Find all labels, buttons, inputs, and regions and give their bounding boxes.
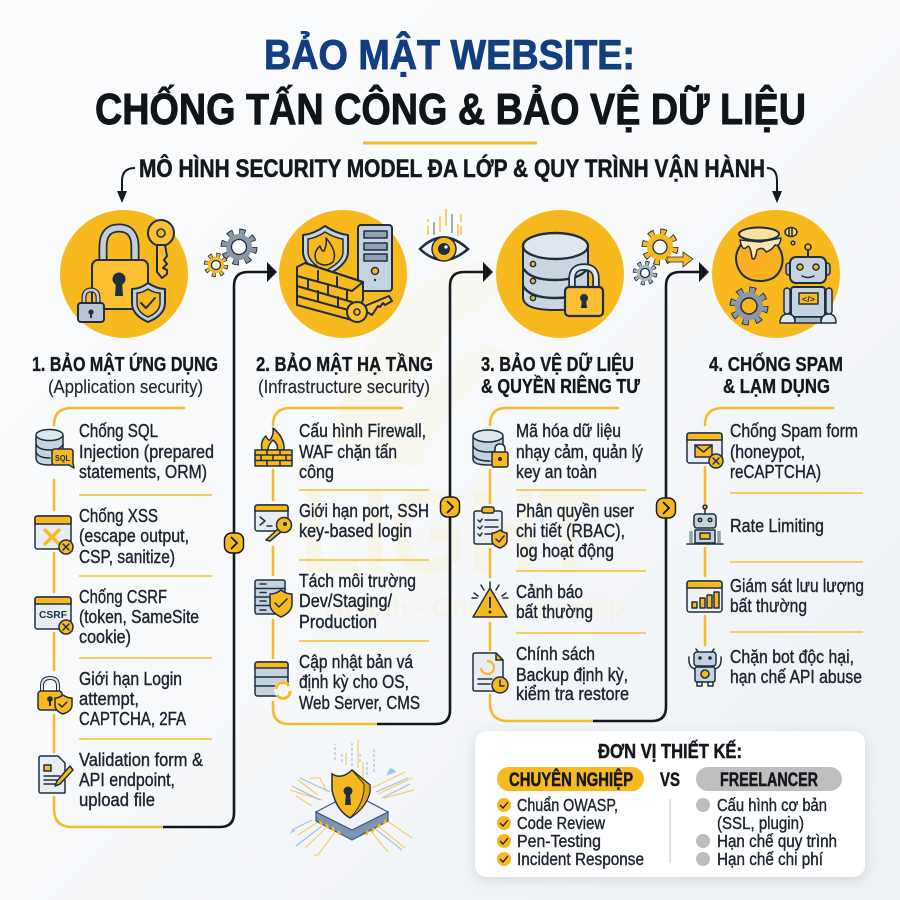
text: login limit: attempt, [79,688,139,709]
chevron badge 1 [224,533,244,553]
card heading: ĐƠN VỊ THIẾT KẾ: [598,740,742,763]
text: traffic monitoring [730,575,864,616]
list: professional: Pen-Testing [517,831,601,851]
icon: database lock [473,430,508,467]
text: rate limiting: Rate Limiting [730,515,824,536]
text: firewall: Cấu hình Firewall, [299,420,426,441]
heading: column 4 [709,352,843,398]
text: spam form: (honeypot, [730,441,805,462]
text: login limit: Giới hạn Login [79,668,182,689]
text: bad bots: Chặn bot độc hại, [730,646,854,667]
icon: spam mail window [687,433,723,468]
connector lines column 3 to 4 [490,262,709,721]
icon: database lock circle [496,210,624,338]
watermark logo [300,260,625,622]
text: validation [79,749,204,810]
text: sql injection [79,420,214,482]
text: validation: Validation form & [79,749,204,770]
list: freelancer: Hạn chế chi phí [717,849,823,869]
heading: column 2 [256,352,433,397]
panel: application security [35,420,214,810]
heading: column 3 [481,352,640,398]
text: backup: kiểm tra restore [516,683,629,704]
heading: column 3: & QUYỀN RIÊNG TƯ [481,374,640,398]
text: port ssh: key-based login [299,520,412,541]
connector lines column 4 [705,408,833,645]
heading: column 2: (Infrastructure security) [258,377,430,397]
icon: backup document [473,653,508,693]
heading: column 3: 3. BẢO VỆ DỮ LIỆU [481,352,634,376]
badge: professional: CHUYÊN NGHIỆP [509,769,633,791]
text: sql injection: Injection (prepared [79,441,214,462]
text: patching: Web Server, CMS [299,692,420,713]
text: firewall: công [299,461,334,482]
icon: honeypot and robot circle [712,210,840,338]
text: csrf [79,586,199,647]
icon: csrf window [35,597,73,634]
list: professional: Code Review [517,813,605,833]
text: bad bots: hạn chế API abuse [730,666,862,687]
title: CHỐNG TẤN CÔNG & BẢO VỆ DỮ LIỆU [95,83,806,134]
text: alerts: Cảnh báo [516,581,583,602]
text: permissions: chi tiết (RBAC), [516,520,625,541]
panel: anti spam [687,420,864,687]
icon: firewall [255,428,292,466]
text: xss: CSP, sanitize) [79,546,175,567]
panel: data protection [472,420,646,704]
text: csrf: Chống CSRF [79,586,167,607]
text: xss: (escape output, [79,525,189,546]
icon: firewall shield circle [279,210,407,338]
text: validation: API endpoint, [79,769,175,790]
text: spam form [730,420,858,482]
text: traffic monitoring: Giám sát lưu lượng [730,575,864,596]
text: alerts: bất thường [516,601,593,622]
text: encryption: Mã hóa dữ liệu [516,420,621,441]
icon: csrf window: CSRF [39,609,68,621]
panel: design unit comparison [475,731,865,877]
text: backup: Backup định kỳ, [516,664,628,685]
icon: terminal key [255,505,292,541]
icon: grey and yellow gears [206,232,254,274]
text: environments: Dev/Staging/ [299,590,393,611]
text: alerts [516,581,593,622]
list: freelancer: Cấu hình cơ bản [717,795,827,815]
text: bad bots [730,646,862,687]
text: permissions [516,500,634,561]
text: port ssh [299,500,429,541]
heading: column 4: & LẠM DỤNG [723,375,830,398]
text: login limit [79,668,187,729]
icon: bad bot [689,649,721,686]
text: sql injection: statements, ORM) [79,461,207,482]
badge: freelancer: FREELANCER [720,770,818,791]
panel: infrastructure security [255,420,429,713]
text: firewall [299,420,426,482]
watermark logo: Nhanh - Chuyên nghiệp [325,592,625,622]
connector lines column 1 to 2 [54,262,277,827]
text: login limit: CAPTCHA, 2FA [79,708,187,729]
text: environments: Tách môi trường [299,570,416,591]
text: traffic monitoring: bất thường [730,595,807,616]
list: professional: Incident Response [517,849,644,869]
subtitle with arrows: MÔ HÌNH SECURITY MODEL ĐA LỚP & QUY TRÌNH VẬN HÀNH [139,153,765,183]
text: xss [79,505,189,567]
text: environments: Production [299,611,377,632]
text: backup: Chính sách [516,643,595,664]
text: permissions: log hoạt động [516,540,614,561]
title [95,30,806,134]
icon: eye [420,209,468,261]
text: validation: upload file [79,789,155,810]
text: csrf: (token, SameSite [79,606,199,627]
heading: column 4: 4. CHỐNG SPAM [709,352,843,376]
subtitle with arrows [117,153,782,203]
text: encryption [516,420,644,482]
connector lines column 2 to 3 [273,262,493,724]
vs label: VS [660,770,680,791]
icon: form validation [39,756,73,793]
list: professional [497,795,644,869]
text: xss: Chống XSS [79,505,158,526]
chevron badge 2 [440,497,460,517]
heading: column 2: 2. BẢO MẬT HẠ TẦNG [256,352,433,376]
icon: sql database: SQL [55,453,70,463]
heading: column 1: (Application security) [48,377,203,397]
icon: warning [472,582,508,617]
text: permissions: Phân quyền user [516,500,634,521]
icon: xss window [35,516,73,554]
list: freelancer: (SSL, plugin) [717,813,804,833]
text: port ssh: Giới hạn port, SSH [299,500,429,521]
text: patching: định kỳ cho OS, [299,671,409,692]
list: freelancer: Hạn chế quy trình [717,831,837,851]
text: sql injection: Chống SQL [79,420,158,441]
icon: sql database [36,430,74,468]
list: freelancer [696,795,837,869]
icon: clipboard shield [474,507,507,548]
list: professional: Chuẩn OWASP, [517,795,618,815]
heading: column 1: 1. BẢO MẬT ỨNG DỤNG [32,352,218,376]
icon: yellow gear with arrow [636,232,693,282]
text: firewall: WAF chặn tấn [299,441,397,462]
text: backup [516,643,629,704]
chevron badge 3 [656,498,676,518]
icon: server shield [255,580,292,617]
heading: column 1 [32,352,218,397]
text: csrf: cookie) [79,626,131,647]
icon: honeypot and robot circle: </> [802,295,815,304]
text: patching: Cập nhật bản vá [299,651,414,672]
icon: traffic chart [687,581,722,612]
icon: rate limit robot [687,505,723,544]
icon: security lock circle [60,210,188,338]
badge: freelancer [696,767,842,791]
text: environments [299,570,416,632]
title: BẢO MẬT WEBSITE: [264,30,635,78]
text: encryption: nhạy cảm, quản lý [516,441,644,462]
watermark logo: LIGHT [300,466,600,598]
text: encryption: key an toàn [516,461,597,482]
illustration: shield on chip [290,740,414,855]
text: spam form: reCAPTCHA) [730,461,821,482]
text: spam form: Chống Spam form [730,420,858,441]
text: patching [299,651,420,713]
icon: login lock [38,678,72,714]
icon: update server [255,662,292,699]
